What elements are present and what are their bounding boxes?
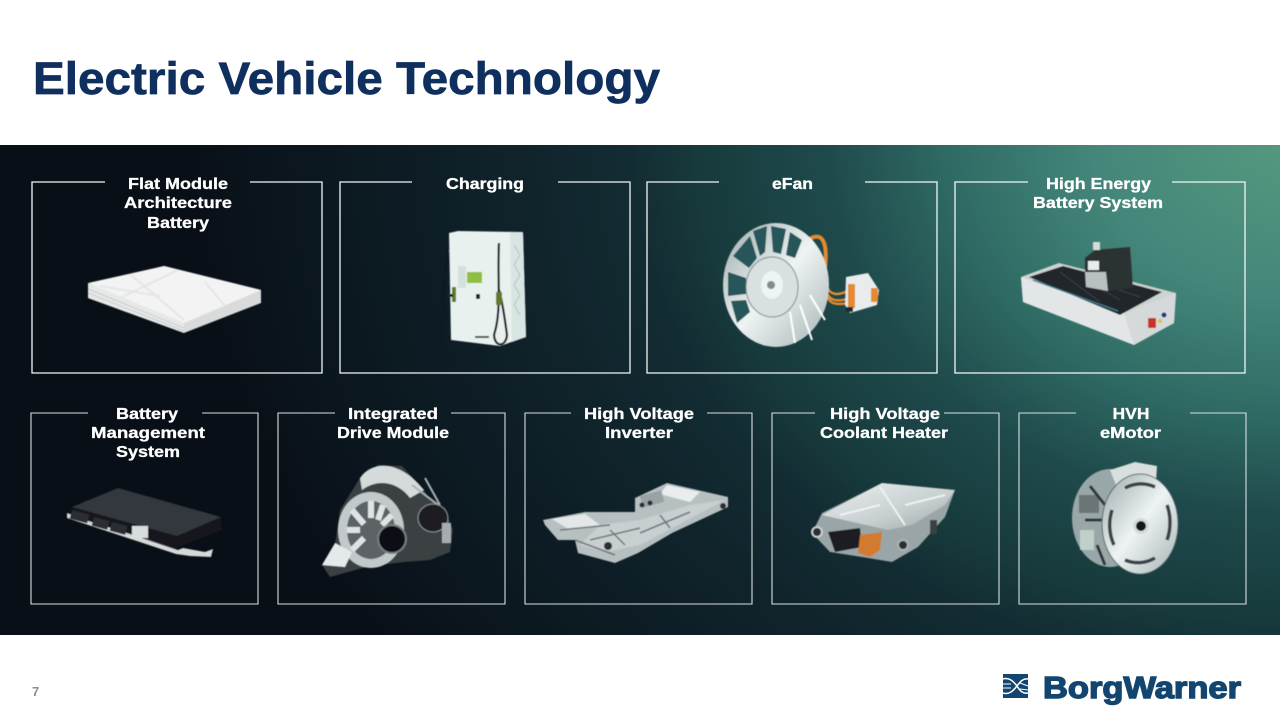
panel: Integrated Drive Module	[278, 406, 505, 604]
heading: High Energy Battery System: High Energy	[1046, 176, 1151, 193]
heading: Flat Module Architecture Battery: Battery	[147, 215, 209, 232]
icon: battery system	[1021, 242, 1176, 345]
icon: HVH eMotor	[1072, 462, 1178, 574]
heading: High Voltage Inverter: Inverter	[605, 425, 673, 442]
heading: HVH eMotor: HVH	[1112, 406, 1150, 423]
heading: Flat Module Architecture Battery	[124, 176, 232, 232]
panel: technology showcase background	[0, 145, 1280, 635]
icon: high voltage inverter	[543, 483, 728, 563]
icon: electric fan	[723, 223, 879, 347]
heading: High Energy Battery System	[1033, 176, 1163, 212]
heading: HVH eMotor: eMotor	[1100, 425, 1161, 442]
heading: High Voltage Inverter: High Voltage	[584, 406, 694, 423]
heading: High Voltage Inverter	[584, 406, 694, 442]
heading: Battery Management System: Battery	[116, 406, 178, 423]
page number: 7	[32, 684, 39, 699]
panel: Charging	[340, 176, 630, 373]
heading: Integrated Drive Module: Integrated	[348, 406, 438, 423]
heading: Flat Module Architecture Battery: Architecture	[124, 195, 232, 212]
logo: BorgWarner	[1003, 670, 1241, 705]
title: Electric Vehicle Technology	[33, 53, 660, 104]
heading: High Voltage Coolant Heater	[820, 406, 948, 442]
panel: HVH eMotor	[1019, 406, 1246, 604]
panel: High Voltage Coolant Heater	[772, 406, 999, 604]
wordmark: BorgWarner	[1043, 670, 1241, 705]
panel: Battery Management System	[31, 406, 258, 604]
icon: integrated drive module	[322, 465, 453, 577]
icon: battery management unit	[67, 488, 222, 557]
icon: flat battery module	[88, 266, 261, 333]
heading: High Voltage Coolant Heater: High Voltage	[830, 406, 940, 423]
heading: High Voltage Coolant Heater: Coolant Heater	[820, 425, 948, 442]
icon: charging station	[441, 231, 526, 346]
heading: Flat Module Architecture Battery: Flat Module	[128, 176, 228, 193]
panel: High Energy Battery System	[955, 176, 1245, 373]
icon: high voltage coolant heater	[812, 483, 955, 562]
heading: High Energy Battery System: Battery System	[1033, 195, 1163, 212]
panel: eFan	[647, 176, 937, 373]
heading: eFan: eFan	[772, 176, 813, 193]
panel: Flat Module Architecture Battery	[32, 176, 322, 373]
heading: Integrated Drive Module	[337, 406, 449, 442]
heading: Battery Management System: System	[116, 444, 180, 461]
panel: High Voltage Inverter	[525, 406, 752, 604]
icon: BorgWarner mark	[1003, 674, 1028, 698]
heading: Battery Management System: Management	[91, 425, 206, 442]
heading: Charging: Charging	[446, 176, 524, 193]
heading: Integrated Drive Module: Drive Module	[337, 425, 449, 442]
heading: Battery Management System	[91, 406, 206, 461]
heading: HVH eMotor	[1100, 406, 1161, 442]
